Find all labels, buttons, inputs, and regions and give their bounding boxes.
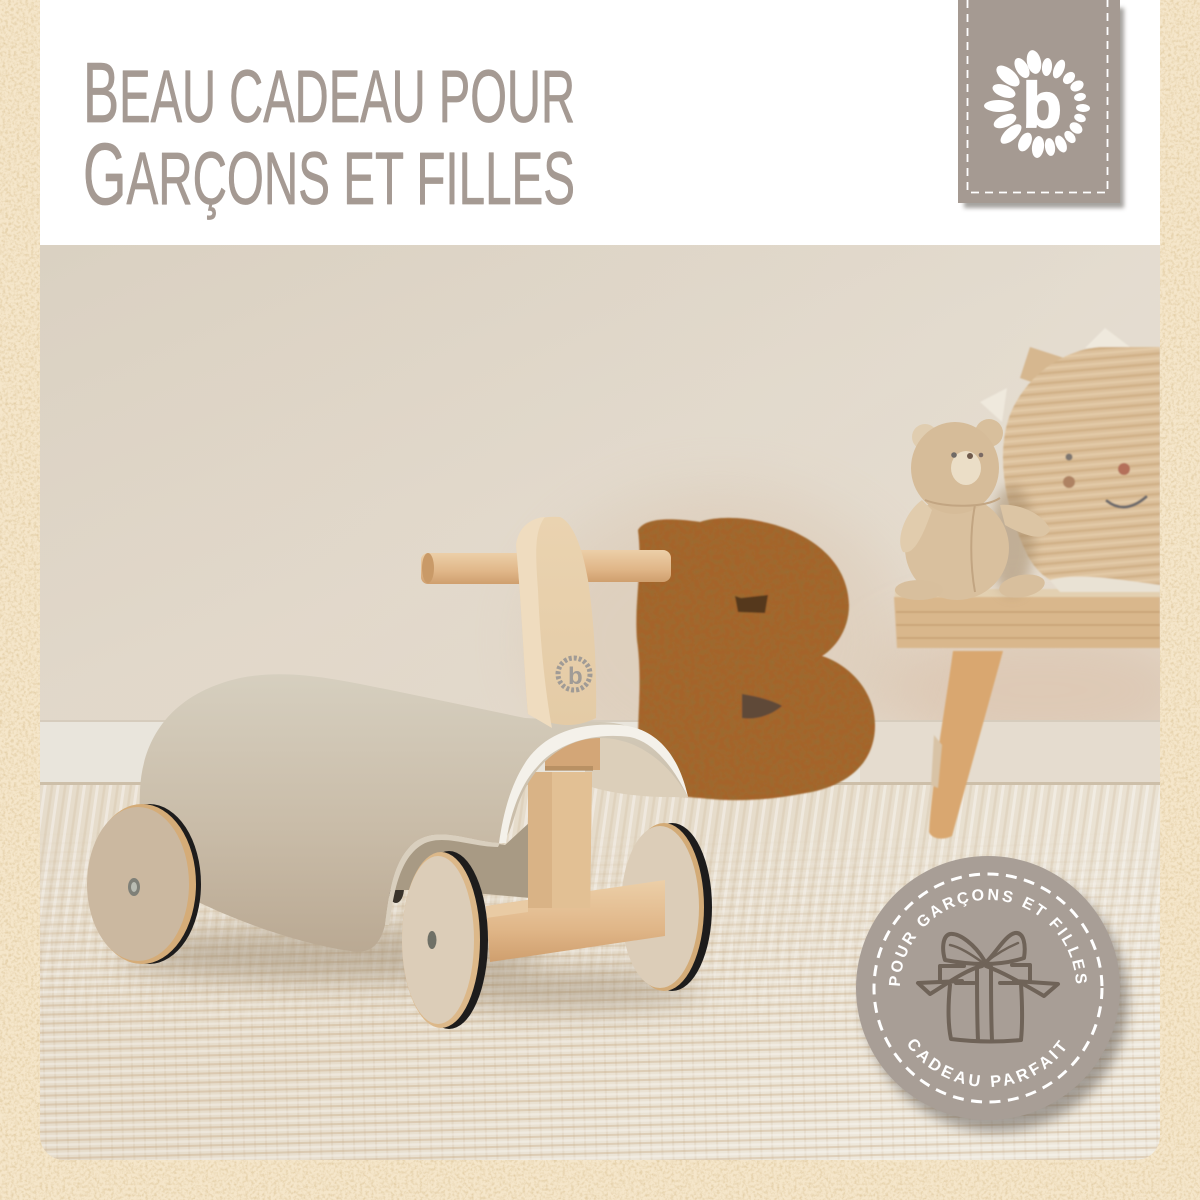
wall xyxy=(40,245,1160,720)
teddy bear xyxy=(895,419,1050,601)
bench leg xyxy=(929,651,1003,839)
letter B cushion xyxy=(636,518,875,800)
carpet xyxy=(40,785,1160,1160)
gift badge xyxy=(856,856,1136,1140)
crossbar xyxy=(486,880,665,962)
baseboard xyxy=(40,720,1160,786)
brand tag xyxy=(958,0,1124,208)
bench xyxy=(894,589,1160,839)
icon: small logo on handle xyxy=(558,658,590,690)
photo scene xyxy=(40,245,1160,1160)
title: BEAU CADEAU POUR xyxy=(83,46,575,141)
ride-on toy xyxy=(87,517,712,1029)
white rim xyxy=(499,725,688,843)
cushion face xyxy=(1063,454,1146,507)
badge text: lower arc: CADEAU PARFAIT xyxy=(908,1039,1066,1087)
shadow under the ride-on xyxy=(120,927,700,1010)
handle upright xyxy=(516,517,596,728)
steering post xyxy=(528,735,600,908)
icon: small logo on handle: b xyxy=(568,663,583,690)
rear left wheel xyxy=(87,804,201,964)
inner lip of the wheel arch xyxy=(385,834,500,925)
icon: brand sun logo xyxy=(984,49,1090,159)
icon: brand sun logo: b xyxy=(1023,71,1061,141)
white header band xyxy=(40,0,1160,245)
icon: gift xyxy=(918,933,1058,1041)
title: GARÇONS ET FILLES xyxy=(83,126,575,223)
title xyxy=(83,46,575,223)
hidden rear wheel xyxy=(389,890,404,903)
handlebar xyxy=(421,550,671,584)
striped plush cushion xyxy=(980,328,1160,592)
front left wheel xyxy=(402,851,488,1029)
underside of the shell xyxy=(385,822,530,898)
back right wheel xyxy=(621,823,712,991)
badge text: upper arc: POUR GARÇONS ET FILLES xyxy=(888,888,1087,986)
shell body xyxy=(138,674,688,952)
